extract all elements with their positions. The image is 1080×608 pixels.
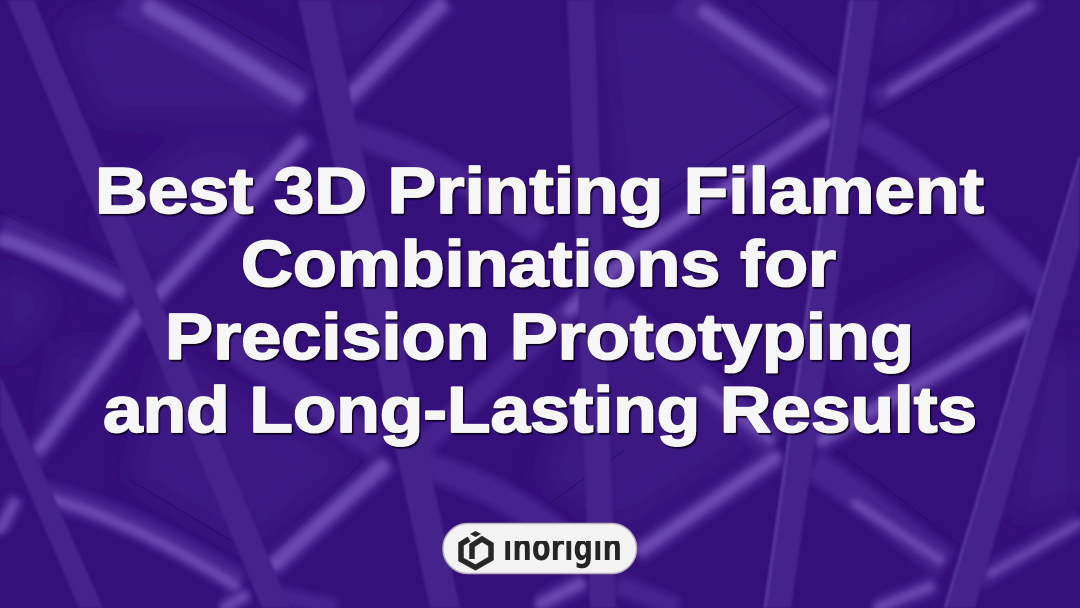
title: Combinations for [241,227,836,300]
strut highlights [765,0,1080,608]
title [95,154,984,446]
icon: inorigin cube [461,531,491,568]
title: Precision Prototyping [165,300,914,373]
title: Best 3D Printing Filament [95,154,984,227]
logo badge [443,524,636,574]
logo wordmark: inorigin [503,526,622,569]
title: and Long-Lasting Results [103,373,977,446]
